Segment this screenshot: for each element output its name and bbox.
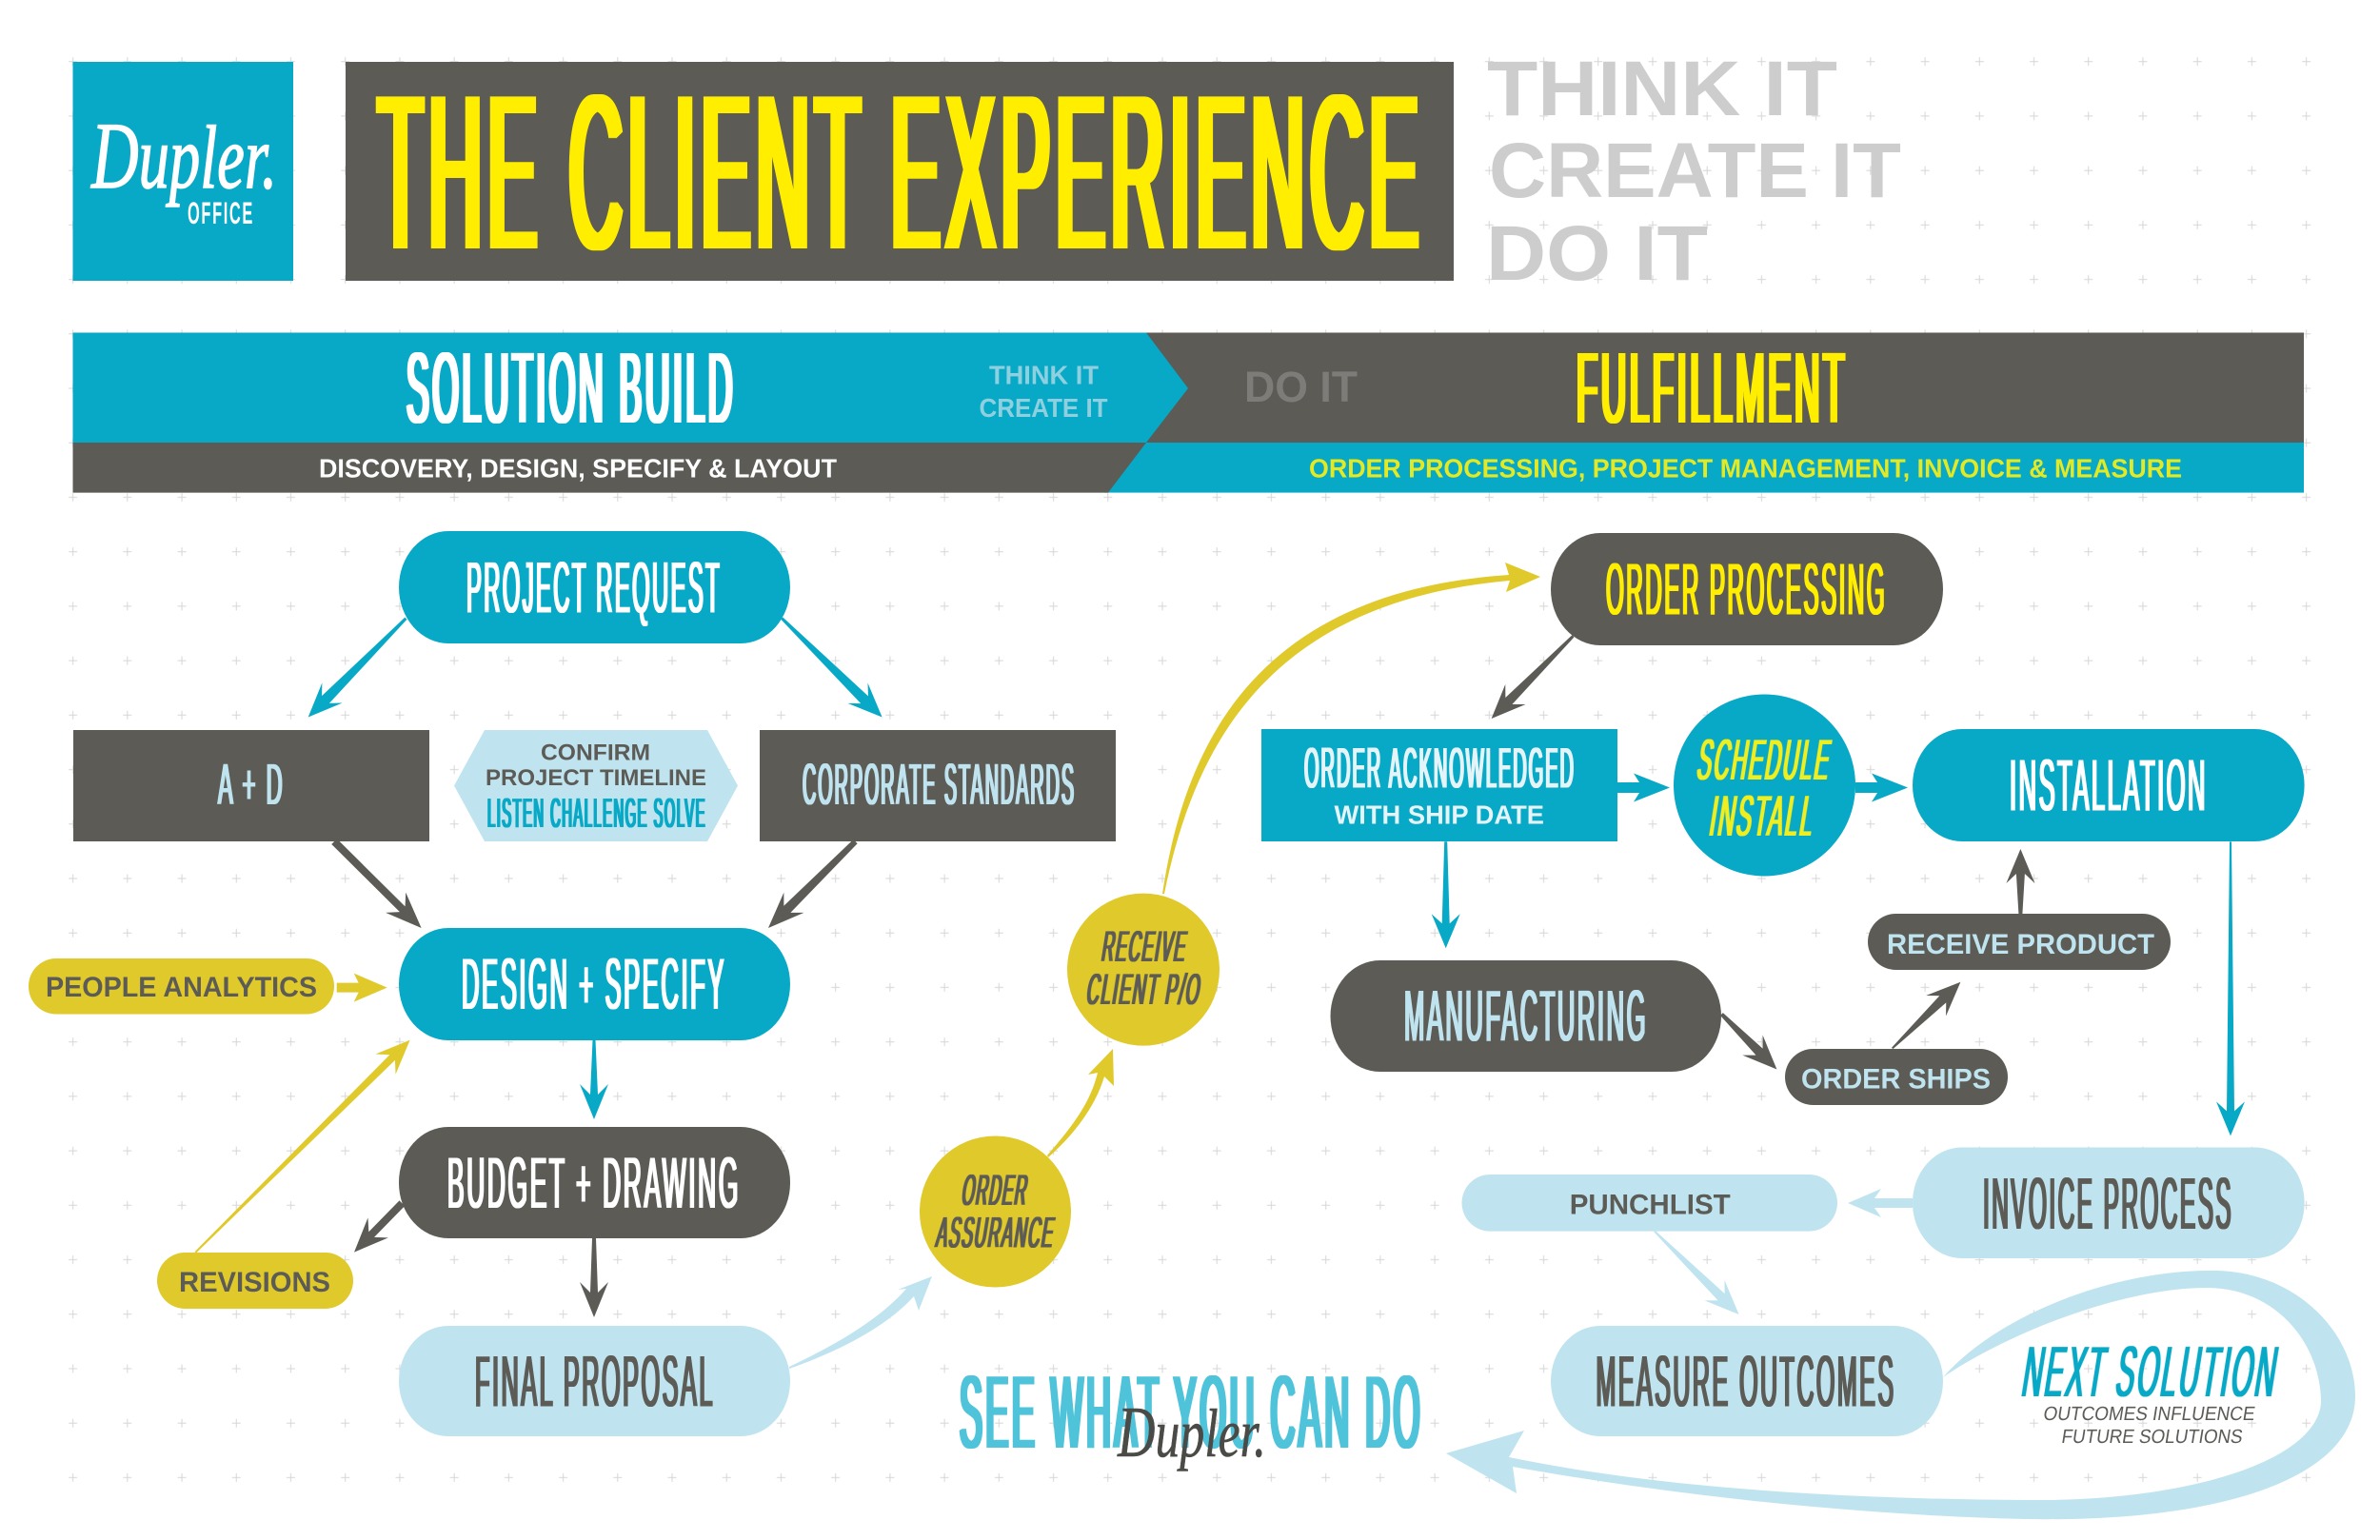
node: order assurance [920, 1136, 1071, 1287]
node: order ships: ORDER SHIPS [1801, 1063, 1991, 1095]
arrow: budget to final proposal [580, 1238, 608, 1317]
logo block: OFFICE [188, 196, 254, 230]
think it create it: THINK IT [989, 361, 1099, 390]
node: budget + drawing [399, 1127, 790, 1238]
arrow: design to budget [580, 1040, 608, 1119]
arrow: invoice to punchlist [1848, 1189, 1913, 1217]
node: invoice process [1913, 1148, 2305, 1258]
node: punchlist [1462, 1175, 1837, 1232]
think it create it [979, 361, 1108, 423]
node: revisions [157, 1253, 353, 1309]
text: ASSURANCE [933, 1208, 1060, 1256]
arrow: schedule to installation [1855, 773, 1908, 801]
arrow: receive client PO to order processing [1162, 563, 1540, 894]
text: CORPORATE STANDARDS [803, 752, 1076, 817]
node: punchlist: PUNCHLIST [1570, 1190, 1731, 1221]
node: confirm hexagon: CONFIRM [541, 740, 650, 766]
node: corporate standards [760, 730, 1116, 841]
node: A+D [73, 730, 429, 841]
node: revisions: REVISIONS [179, 1267, 330, 1298]
node: order acknowledged [1261, 729, 1617, 841]
arrow: next solution loop [1446, 1271, 2355, 1519]
subheading: order processing: ORDER PROCESSING, PROJECT MANAGEMENT, INVOICE & MEASURE [1309, 454, 2182, 484]
node: people analytics [29, 958, 334, 1015]
text: CLIENT P/O [1083, 964, 1206, 1014]
node: order assurance: ORDER [959, 1165, 1033, 1214]
phase band [72, 332, 2304, 493]
tagline: THINK IT [1487, 46, 1837, 132]
arrow: order ships to receive product [1882, 972, 1971, 1058]
text: BUDGET + DRAWING [447, 1143, 741, 1224]
arrow: A+D to design [324, 831, 431, 938]
title banner [346, 49, 1454, 296]
node: confirm hexagon [454, 730, 738, 841]
text: ORDER ACKNOWLEDGED [1304, 737, 1576, 800]
node: receive client P/O: RECEIVE [1099, 921, 1192, 971]
subheading: discovery: DISCOVERY, DESIGN, SPECIFY & LAYOUT [319, 454, 837, 484]
arrow: acknowledged to schedule [1617, 773, 1670, 801]
node: final proposal [399, 1326, 790, 1436]
text: next solution [2017, 1332, 2286, 1448]
phase band: SOLUTION BUILD [407, 332, 736, 444]
arrow: order processing to order acknowledged [1481, 626, 1583, 729]
do it: DO IT [1244, 363, 1358, 411]
logo block: Dupler. [90, 103, 277, 208]
node: confirm hexagon: PROJECT TIMELINE [486, 765, 706, 791]
node: receive product: RECEIVE PRODUCT [1887, 929, 2154, 960]
arrow: project request to corporate standards [772, 608, 892, 727]
text: FINAL PROPOSAL [475, 1342, 715, 1422]
logo block [72, 62, 293, 281]
node: order acknowledged: WITH SHIP DATE [1335, 800, 1544, 830]
text: SEE WHAT YOU CAN DO [960, 1354, 1423, 1471]
node: schedule install: INSTALL [1706, 783, 1821, 848]
logo: dupler script: Dupler. [1117, 1392, 1266, 1472]
text: DESIGN + SPECIFY [462, 944, 726, 1025]
arrow: project request to A+D [298, 608, 416, 727]
node: manufacturing [1331, 960, 1721, 1072]
arrow: installation to invoice [2216, 841, 2245, 1135]
node: installation [1913, 729, 2305, 841]
arrow: manufacturing to order ships [1712, 1004, 1787, 1079]
node: order ships [1785, 1049, 2008, 1105]
text: next solution: FUTURE SOLUTIONS [2060, 1426, 2245, 1448]
node: project request [399, 531, 790, 643]
arrow: corporate standards to design [758, 831, 865, 938]
text: next solution: OUTCOMES INFLUENCE [2042, 1403, 2256, 1425]
arrow: order assurance to receive client PO [1047, 1049, 1114, 1157]
arrow: final proposal to order assurance [789, 1276, 932, 1369]
text: PROJECT REQUEST [466, 547, 722, 628]
arrow: revisions to design [186, 1030, 420, 1262]
text: LISTEN CHALLENGE SOLVE [487, 790, 706, 837]
arrow: budget to revisions [344, 1194, 412, 1262]
arrow: people analytics to design [337, 974, 387, 1002]
tagline: CREATE IT [1489, 128, 1901, 214]
node: A+D: A + D [218, 752, 285, 817]
think it create it: CREATE IT [979, 393, 1108, 423]
node: order processing [1551, 533, 1943, 645]
arrow: receive product to installation [2006, 849, 2034, 914]
phase band: FULFILLMENT [1577, 332, 1848, 444]
node: receive product [1868, 914, 2171, 970]
arrow: acknowledged to manufacturing [1432, 841, 1460, 948]
text: MANUFACTURING [1404, 977, 1648, 1056]
node: design + specify [399, 928, 790, 1040]
node: people analytics: PEOPLE ANALYTICS [46, 972, 317, 1003]
tagline [1486, 46, 1901, 297]
node: measure outcomes [1551, 1326, 1943, 1436]
arrow: punchlist to measure outcomes [1644, 1221, 1749, 1325]
node: schedule install [1674, 695, 1855, 876]
tagline: DO IT [1486, 210, 1708, 297]
text: SCHEDULE [1694, 727, 1837, 792]
node: receive client P/O [1067, 894, 1220, 1046]
